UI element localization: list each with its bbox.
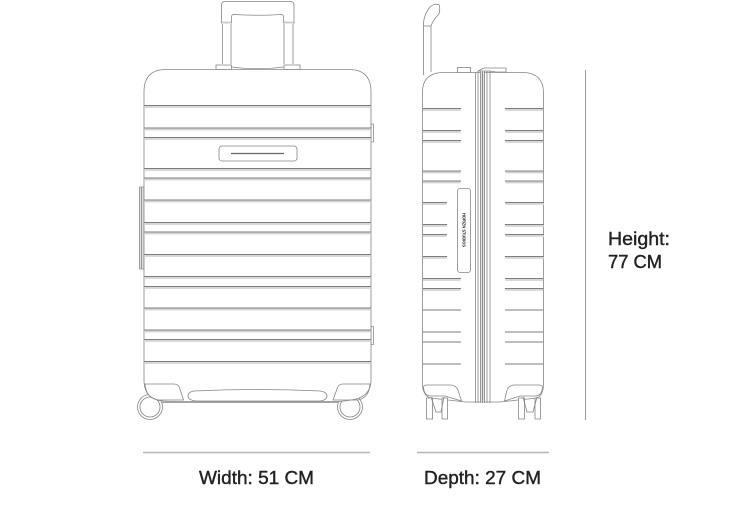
- height dimension line: [584, 70, 586, 420]
- brand label panel: HORIZN STUDIOS: [462, 213, 466, 247]
- side latches, right: [371, 124, 374, 344]
- height label: [608, 229, 670, 272]
- brand label panel: [458, 188, 470, 272]
- front view of suitcase: [138, 2, 374, 420]
- carry handle, front: [219, 146, 297, 161]
- suitcase body, front: [144, 70, 371, 402]
- width dimension line: [143, 452, 370, 454]
- wheels, front: [138, 394, 362, 420]
- suitcase body, side: [422, 72, 544, 402]
- horizontal ribs, side: [423, 108, 544, 364]
- height label: Height:: [608, 229, 670, 249]
- depth dimension line: [417, 452, 549, 454]
- bottom guards, side: [424, 385, 542, 401]
- height label: 77 CM: [608, 252, 662, 272]
- depth label: Depth: 27 CM: [424, 468, 541, 488]
- bottom corner guards and skid pad: [145, 384, 370, 402]
- side grip, left: [140, 187, 144, 269]
- top handle stubs, side: [458, 68, 506, 72]
- side view of suitcase: [422, 4, 544, 419]
- central zipper bands: [476, 71, 490, 403]
- icon: telescopic handle, front: [216, 2, 300, 70]
- horizontal ribs, front: [144, 106, 371, 363]
- width label: Width: 51 CM: [199, 468, 314, 488]
- icon: telescopic handle, side: [423, 4, 440, 75]
- wheels, side: [426, 397, 540, 419]
